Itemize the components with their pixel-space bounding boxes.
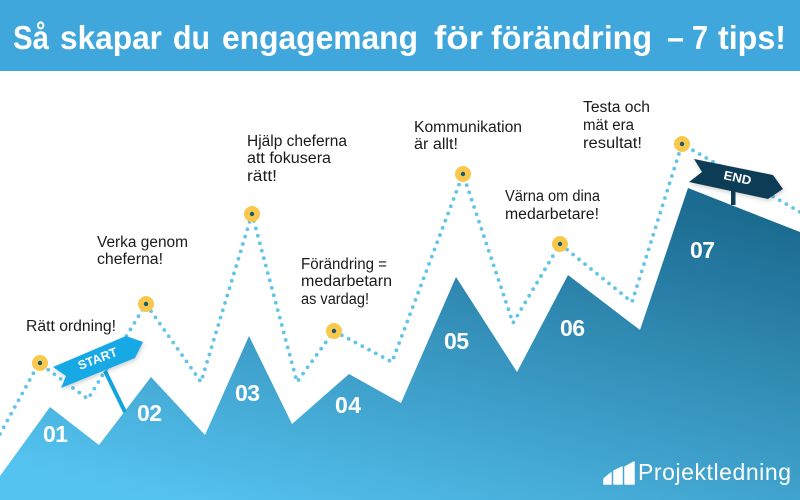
tip 2 label xyxy=(97,234,188,268)
title: engagemang xyxy=(222,19,418,56)
step numbers: 07 xyxy=(690,237,715,263)
tip 4 label: as vardag! xyxy=(301,291,369,308)
end sign xyxy=(689,159,783,205)
tip 3 label xyxy=(247,133,347,185)
step numbers xyxy=(43,237,715,447)
tip 4 label: Förändring = xyxy=(301,256,387,273)
title: skapar xyxy=(60,19,162,56)
title: – xyxy=(667,19,684,56)
title: förändring xyxy=(491,19,652,56)
tip 7 label: Testa och xyxy=(583,99,650,116)
milestone markers xyxy=(32,136,690,371)
tip 7 label xyxy=(583,99,650,152)
tip 7 label: mät era xyxy=(583,117,634,134)
step numbers: 05 xyxy=(444,328,469,354)
tip 3 label: att fokusera xyxy=(247,150,331,167)
step numbers: 04 xyxy=(335,392,361,418)
title xyxy=(13,19,786,56)
tip 1 label: Rätt ordning! xyxy=(26,318,116,335)
step numbers: 06 xyxy=(560,315,585,341)
tip 3 label: rätt! xyxy=(247,168,277,185)
tip 3 label: Hjälp cheferna xyxy=(247,133,347,150)
tip 7 label: resultat! xyxy=(583,135,642,152)
title: tips! xyxy=(718,19,786,56)
title: du xyxy=(173,19,210,56)
tip 2 label: Verka genom xyxy=(97,234,188,251)
tip 5 label xyxy=(414,119,522,153)
tip 2 label: cheferna! xyxy=(97,251,163,268)
title: för xyxy=(434,19,483,56)
step numbers: 02 xyxy=(137,400,162,426)
tip 6 label: medarbetare! xyxy=(505,206,599,223)
header band xyxy=(0,0,800,71)
tip 4 label xyxy=(301,256,392,308)
tip 5 label: Kommunikation xyxy=(414,119,522,136)
logo: Projektledning xyxy=(638,459,791,485)
tip 6 label xyxy=(505,188,600,223)
tip 6 label: Värna om dina xyxy=(505,188,600,205)
step numbers: 01 xyxy=(43,421,68,447)
mountain range xyxy=(0,188,800,500)
title: 7 xyxy=(692,19,708,56)
tip 5 label: är allt! xyxy=(414,136,458,153)
end sign: END xyxy=(722,168,753,188)
tip 4 label: medarbetarn xyxy=(301,273,392,290)
start sign xyxy=(53,336,143,412)
title: Så xyxy=(13,19,50,56)
dotted route xyxy=(0,144,800,434)
start sign: START xyxy=(76,345,120,373)
step numbers: 03 xyxy=(235,380,260,406)
